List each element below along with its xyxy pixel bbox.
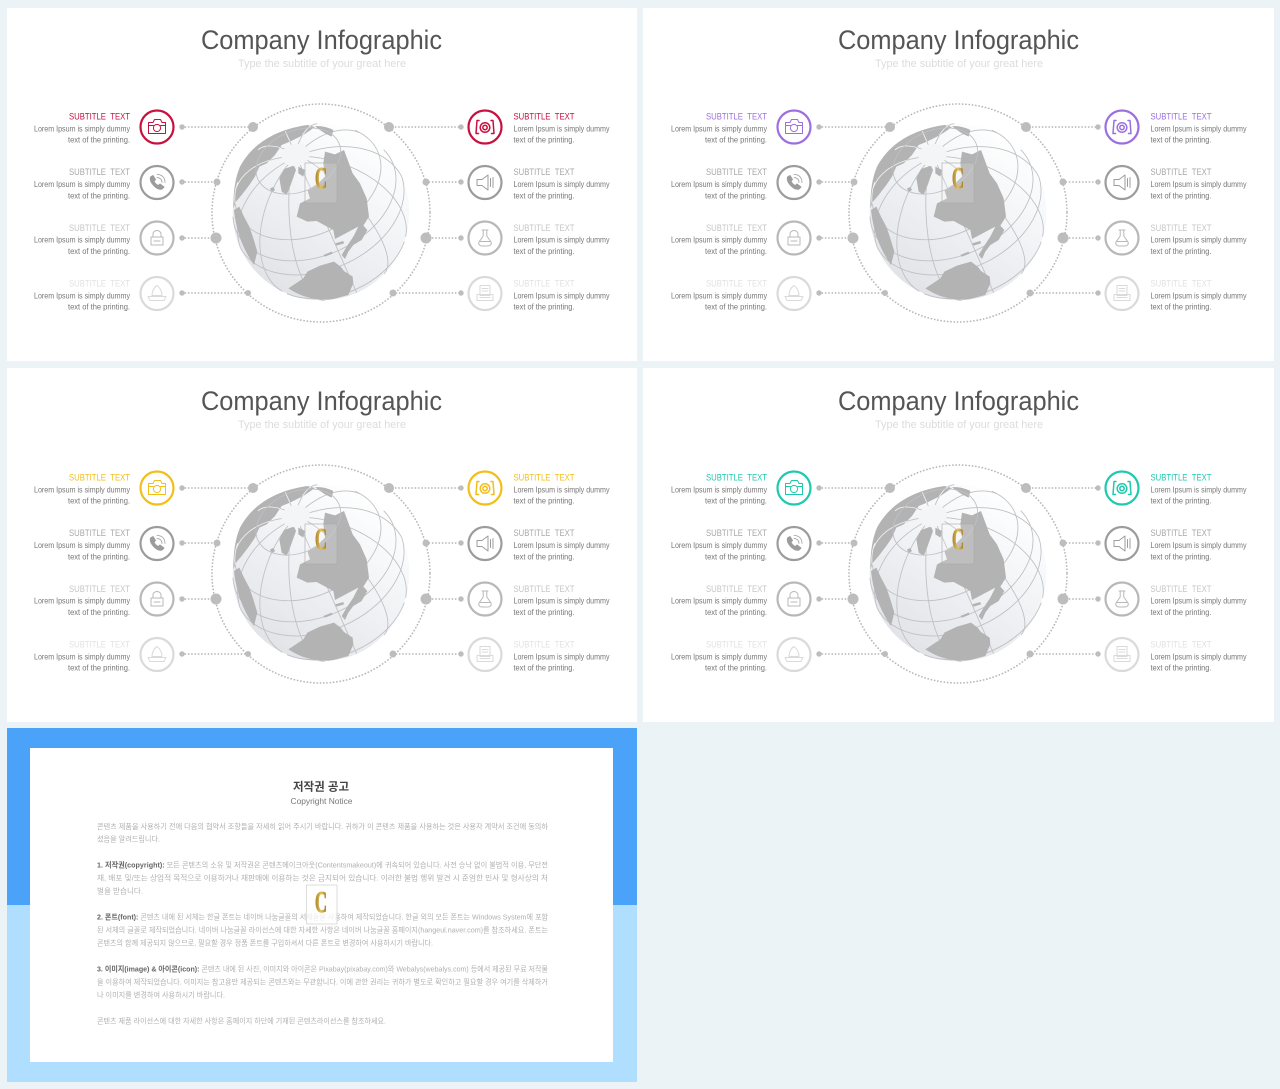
- left item 1: SUBTITLE TEXT: [69, 472, 130, 484]
- right item 2: [1106, 527, 1247, 561]
- right item 2: [1106, 166, 1247, 200]
- right item 4: Lorem Ipsum is simply dummy: [514, 291, 610, 300]
- right item 3: [1106, 222, 1247, 256]
- notice intro: [97, 821, 548, 844]
- left item 4: Lorem Ipsum is simply dummy: [671, 652, 767, 661]
- left item 2: Lorem Ipsum is simply dummy: [34, 541, 130, 550]
- watermark logo: C: [315, 884, 327, 919]
- notice intro: 셨음을 알려드립니다.: [97, 834, 160, 844]
- left item 2: text of the printing.: [705, 191, 767, 200]
- right item 3: SUBTITLE TEXT: [514, 223, 575, 234]
- panel: infographic teal: [643, 368, 1274, 722]
- right item 4: text of the printing.: [514, 664, 574, 673]
- panel: infographic yellow: [7, 368, 637, 722]
- right item 1: Lorem Ipsum is simply dummy: [514, 124, 610, 133]
- left item 1: [671, 110, 810, 145]
- right item 4: text of the printing.: [514, 303, 574, 312]
- watermark logo: [942, 521, 974, 564]
- right item 4: text of the printing.: [1150, 303, 1212, 312]
- left item 4: SUBTITLE TEXT: [69, 278, 130, 290]
- left item 1: text of the printing.: [705, 136, 767, 145]
- left item 4: SUBTITLE TEXT: [706, 278, 767, 290]
- left item 2: text of the printing.: [68, 552, 130, 561]
- left item 3: [34, 222, 174, 256]
- right item 3: SUBTITLE TEXT: [1150, 223, 1212, 234]
- right item 3: [468, 582, 610, 617]
- watermark logo: C: [315, 160, 327, 195]
- left item 1: Lorem Ipsum is simply dummy: [34, 124, 130, 133]
- left item 2: [34, 166, 174, 200]
- right item 3: Lorem Ipsum is simply dummy: [1150, 597, 1247, 606]
- left item 4: text of the printing.: [68, 664, 130, 673]
- left item 2: [671, 527, 810, 561]
- left item 1: Lorem Ipsum is simply dummy: [671, 124, 767, 133]
- right item 2: SUBTITLE TEXT: [514, 167, 575, 178]
- right item 1: [468, 472, 610, 506]
- right item 1: SUBTITLE TEXT: [514, 472, 575, 484]
- left item 3: text of the printing.: [705, 608, 767, 617]
- left item 3: SUBTITLE TEXT: [69, 223, 130, 234]
- dotted ring and connectors: [816, 104, 1101, 322]
- right item 3: text of the printing.: [514, 608, 574, 617]
- right item 3: Lorem Ipsum is simply dummy: [514, 597, 610, 606]
- left item 1: text of the printing.: [705, 497, 767, 506]
- left item 2: [34, 527, 174, 561]
- left item 3: text of the printing.: [68, 247, 130, 256]
- right item 2: [468, 527, 610, 561]
- notice intro: 콘텐츠 제품을 사용하기 전에 다음의 협약서 조항들을 자세히 읽어 주시기 바랍니다. 귀하가 이 콘텐츠 제품을 사용하는 것은 사용자 계약서 조건에 동의하: [97, 821, 548, 831]
- left item 1: SUBTITLE TEXT: [706, 112, 767, 122]
- right item 4: SUBTITLE TEXT: [514, 278, 575, 290]
- left item 3: SUBTITLE TEXT: [706, 584, 767, 595]
- notice section 2: 된 서체의 글꼴로 제작되었습니다. 네이버 나눔글꼴 라이선스에 대한 자세한 사항은 네이버 나눔글꼴 홈페이지(hangeul.naver.com)를 참조하세요. 폰트는: [97, 924, 548, 934]
- right item 4: Lorem Ipsum is simply dummy: [1150, 652, 1247, 661]
- left item 1: [671, 472, 810, 506]
- notice heading: 저작권 공고: [293, 780, 349, 794]
- left item 1: Lorem Ipsum is simply dummy: [34, 485, 130, 494]
- right item 3: SUBTITLE TEXT: [1150, 584, 1212, 595]
- right item 1: Lorem Ipsum is simply dummy: [1150, 485, 1247, 494]
- subtitle: Type the subtitle of your great here: [238, 419, 406, 431]
- notice section 2: 2. 폰트(font): 콘텐츠 내에 된 서체는 한글 폰트는 네이버 나눔글꼴의 서체들을 사용하여 제작되었습니다. 한글 외의 모든 폰트는 Windows System에 포함: [97, 912, 548, 922]
- left item 4: Lorem Ipsum is simply dummy: [34, 652, 130, 661]
- dotted ring and connectors: [816, 465, 1101, 683]
- right item 2: text of the printing.: [514, 552, 574, 561]
- watermark logo: [305, 160, 337, 203]
- left item 2: Lorem Ipsum is simply dummy: [671, 180, 767, 189]
- right item 4: [1106, 277, 1247, 312]
- notice section 3: [97, 964, 548, 1000]
- left item 4: [34, 638, 174, 673]
- right item 4: text of the printing.: [1150, 664, 1212, 673]
- right item 3: text of the printing.: [514, 247, 574, 256]
- watermark logo: [305, 521, 337, 564]
- subtitle: Type the subtitle of your great here: [875, 58, 1043, 70]
- left item 2: Lorem Ipsum is simply dummy: [34, 180, 130, 189]
- left item 3: [34, 582, 174, 617]
- globe: [233, 476, 409, 661]
- right item 2: SUBTITLE TEXT: [514, 528, 575, 539]
- left item 3: [671, 582, 810, 617]
- right item 4: Lorem Ipsum is simply dummy: [1150, 291, 1247, 300]
- right item 2: Lorem Ipsum is simply dummy: [1150, 541, 1247, 550]
- dotted ring and connectors: [179, 465, 464, 683]
- left item 3: text of the printing.: [68, 608, 130, 617]
- right item 3: [1106, 582, 1247, 617]
- watermark logo: C: [315, 521, 327, 556]
- right item 1: [1106, 110, 1247, 145]
- left item 2: SUBTITLE TEXT: [706, 528, 767, 539]
- left item 3: text of the printing.: [705, 247, 767, 256]
- left item 2: [671, 166, 810, 200]
- notice section 1: [97, 860, 548, 896]
- watermark logo: [306, 884, 337, 924]
- notice section 1: 1. 저작권(copyright): 모든 콘텐츠의 소유 및 저작권은 콘텐츠메이크아웃(Contentsmakeout)에 귀속되어 있습니다. 사전 승낙 없이 불법적 이용, 무단전: [97, 860, 548, 870]
- subtitle: Type the subtitle of your great here: [238, 58, 406, 70]
- notice subheading: Copyright Notice: [291, 796, 353, 806]
- left item 4: [34, 277, 174, 312]
- left item 1: SUBTITLE TEXT: [706, 472, 767, 484]
- left item 3: [671, 222, 810, 256]
- left item 1: [34, 110, 174, 145]
- watermark logo: C: [952, 521, 964, 556]
- notice footer line: 콘텐츠 제품 라이선스에 대한 자세한 사항은 홈페이지 하단에 기재된 콘텐츠라이선스를 참조하세요.: [97, 1016, 386, 1026]
- left item 2: SUBTITLE TEXT: [69, 167, 130, 178]
- right item 1: [468, 110, 610, 145]
- left item 4: text of the printing.: [705, 664, 767, 673]
- left item 4: [671, 638, 810, 673]
- right item 1: Lorem Ipsum is simply dummy: [1150, 124, 1247, 133]
- left item 1: text of the printing.: [68, 136, 130, 145]
- left item 2: text of the printing.: [68, 191, 130, 200]
- left item 4: Lorem Ipsum is simply dummy: [34, 291, 130, 300]
- right item 3: SUBTITLE TEXT: [514, 584, 575, 595]
- right item 4: Lorem Ipsum is simply dummy: [514, 652, 610, 661]
- right item 1: SUBTITLE TEXT: [1150, 472, 1212, 484]
- right item 3: Lorem Ipsum is simply dummy: [1150, 236, 1247, 245]
- right item 2: Lorem Ipsum is simply dummy: [514, 180, 610, 189]
- left item 4: text of the printing.: [68, 303, 130, 312]
- notice section 3: 을 이용하여 제작되었습니다. 이미지는 참고용만 제공되는 콘텐츠와는 무관합니다. 이에 관한 권리는 귀하가 별도로 확인하고 필요할 경우 여기를 삭제하거: [97, 976, 548, 986]
- right item 2: text of the printing.: [1150, 191, 1212, 200]
- left item 4: SUBTITLE TEXT: [69, 640, 130, 650]
- watermark logo: [942, 160, 974, 203]
- right item 3: text of the printing.: [1150, 247, 1212, 256]
- left item 2: SUBTITLE TEXT: [69, 528, 130, 539]
- subtitle: Type the subtitle of your great here: [875, 419, 1043, 431]
- right item 2: SUBTITLE TEXT: [1150, 528, 1212, 539]
- right item 3: Lorem Ipsum is simply dummy: [514, 236, 610, 245]
- right item 1: SUBTITLE TEXT: [514, 112, 575, 122]
- right item 4: [1106, 638, 1247, 673]
- title: Company Infographic: [201, 25, 442, 55]
- left item 3: Lorem Ipsum is simply dummy: [34, 597, 130, 606]
- left item 3: Lorem Ipsum is simply dummy: [671, 236, 767, 245]
- right item 2: SUBTITLE TEXT: [1150, 167, 1212, 178]
- right item 1: text of the printing.: [514, 136, 574, 145]
- right item 4: [468, 638, 610, 673]
- globe: [870, 476, 1046, 661]
- left item 3: Lorem Ipsum is simply dummy: [34, 236, 130, 245]
- right item 3: [468, 222, 610, 256]
- left item 4: text of the printing.: [705, 303, 767, 312]
- panel: infographic purple: [643, 8, 1274, 361]
- globe: [870, 115, 1046, 300]
- left item 1: SUBTITLE TEXT: [69, 112, 130, 122]
- notice section 3: 나 이미지를 변경하여 사용하시기 바랍니다.: [97, 990, 225, 1000]
- notice section 2: [97, 912, 548, 948]
- right item 4: SUBTITLE TEXT: [514, 640, 575, 650]
- right item 2: [468, 166, 610, 200]
- right item 1: [1106, 472, 1247, 506]
- title: Company Infographic: [838, 386, 1079, 416]
- left item 4: [671, 277, 810, 312]
- globe: [233, 115, 409, 300]
- dotted ring and connectors: [179, 104, 464, 322]
- notice section 1: 벌을 받습니다.: [97, 886, 143, 896]
- left item 1: Lorem Ipsum is simply dummy: [671, 485, 767, 494]
- right item 4: [468, 277, 610, 312]
- left item 3: SUBTITLE TEXT: [69, 584, 130, 595]
- notice section 3: 3. 이미지(image) & 아이콘(icon): 콘텐츠 내에 된 사진, 이미지와 아이콘은 Pixabay(pixabay.com)와 Webalys(webalys.com) 등에서 제공된 무료 저작물: [97, 964, 548, 974]
- left item 2: text of the printing.: [705, 552, 767, 561]
- title: Company Infographic: [838, 25, 1079, 55]
- left item 3: SUBTITLE TEXT: [706, 223, 767, 234]
- right item 1: Lorem Ipsum is simply dummy: [514, 485, 610, 494]
- left item 2: Lorem Ipsum is simply dummy: [671, 541, 767, 550]
- right item 4: SUBTITLE TEXT: [1150, 640, 1212, 650]
- right item 3: text of the printing.: [1150, 608, 1212, 617]
- right item 1: text of the printing.: [1150, 497, 1212, 506]
- left item 3: Lorem Ipsum is simply dummy: [671, 597, 767, 606]
- left item 2: SUBTITLE TEXT: [706, 167, 767, 178]
- panel: infographic crimson: [7, 8, 637, 361]
- title: Company Infographic: [201, 386, 442, 416]
- notice section 2: 콘텐츠의 함께 제공되지 않으므로, 필요할 경우 정품 폰트를 구입하셔서 다른 폰트로 변경하여 사용하시기 바랍니다.: [97, 938, 433, 948]
- left item 1: [34, 472, 174, 506]
- panel: copyright notice: [7, 728, 637, 1082]
- left item 1: text of the printing.: [68, 497, 130, 506]
- right item 2: Lorem Ipsum is simply dummy: [1150, 180, 1247, 189]
- right item 1: text of the printing.: [1150, 136, 1212, 145]
- right item 2: text of the printing.: [1150, 552, 1212, 561]
- right item 2: Lorem Ipsum is simply dummy: [514, 541, 610, 550]
- right item 1: text of the printing.: [514, 497, 574, 506]
- left item 4: SUBTITLE TEXT: [706, 640, 767, 650]
- right item 1: SUBTITLE TEXT: [1150, 112, 1212, 122]
- right item 4: SUBTITLE TEXT: [1150, 278, 1212, 290]
- notice section 1: 재, 배포 및/또는 상업적 목적으로 이용하거나 재판매에 이용하는 것은 금지되어 있습니다. 이러한 불법 행위 발견 시 준엄한 민사 및 형사상의 처: [97, 872, 548, 882]
- left item 4: Lorem Ipsum is simply dummy: [671, 291, 767, 300]
- watermark logo: C: [952, 160, 964, 195]
- right item 2: text of the printing.: [514, 191, 574, 200]
